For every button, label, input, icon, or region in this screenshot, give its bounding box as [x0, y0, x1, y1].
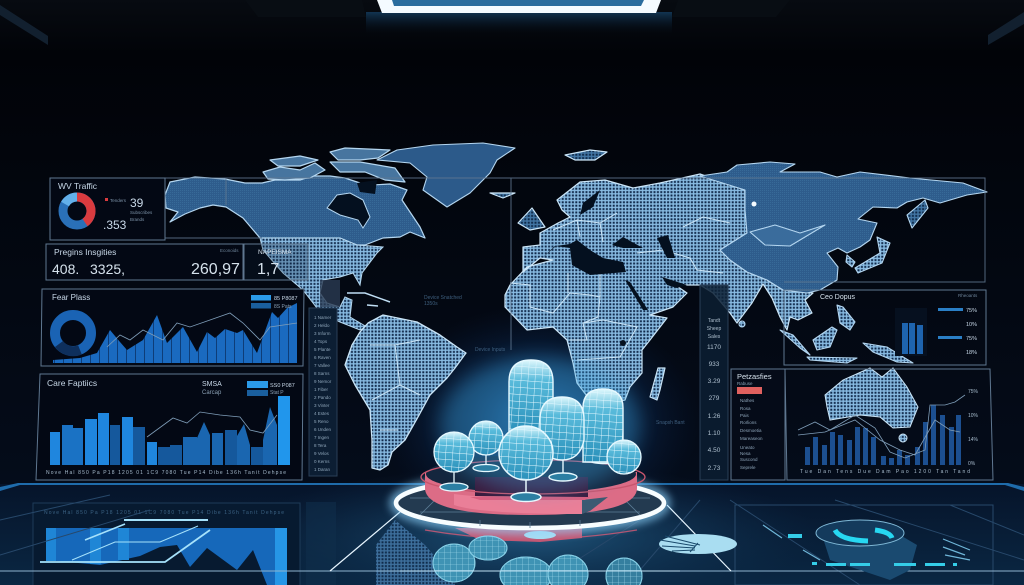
- list items: Desmoetia: [740, 428, 762, 433]
- list items: Rosa: [740, 406, 751, 411]
- platform with domes: [396, 357, 664, 528]
- heading: Petzasfies: [737, 372, 772, 381]
- legend: SS0 P087: [270, 383, 295, 389]
- heading: Fear Plass: [52, 293, 90, 302]
- list items: Seprele: [740, 465, 756, 470]
- stats: Brands: [130, 217, 145, 222]
- heading: insights: Pregins Insgities: [54, 247, 116, 257]
- panel: number column: Sales: [708, 334, 721, 340]
- heading: Ceo Dopus: [820, 294, 856, 301]
- panel: list column left: 9 Nemor: [314, 379, 332, 384]
- legend: 85 P8087: [274, 296, 298, 302]
- dome: tall right: [583, 389, 623, 464]
- panel: number column: 1170: [707, 344, 721, 351]
- panel: number column: 3.29: [708, 378, 721, 385]
- map: Greenland: [377, 143, 515, 207]
- panel: list column left: 1 Daran: [314, 467, 331, 472]
- panel: list column left: 4 Estes: [314, 411, 330, 416]
- trend line: [147, 412, 277, 437]
- stats: Subscribes: [130, 210, 153, 215]
- panel: list column left: 6 Unden: [314, 427, 332, 432]
- ring glow: [396, 478, 664, 528]
- stat values: NAPEISMA: [258, 249, 292, 256]
- donut chart: [63, 197, 91, 225]
- ring disc: [396, 478, 664, 528]
- list items: Suscond: [740, 457, 758, 462]
- stat values: 3325,: [90, 261, 125, 277]
- reflected axis labels: Nove Hal 850 Pa P18 1205 01 1C9 7080 Tue P14 Dibe 136h Tanit Dehpse: [44, 510, 284, 516]
- map: South America: [345, 315, 466, 470]
- stat values: [52, 248, 292, 278]
- map labels: [424, 295, 685, 426]
- subheading: [202, 381, 222, 396]
- list items: Uneato: [740, 445, 755, 450]
- map: Foxe Basin: [357, 180, 377, 194]
- panel: list column left: 5 Plante: [314, 347, 331, 352]
- platform reflection: [400, 528, 680, 585]
- panel: list column left: [309, 280, 340, 476]
- list items: [740, 398, 763, 470]
- heading: Care Faptiics: [47, 378, 97, 388]
- list items: Rorlions: [740, 420, 757, 425]
- panel: Australia chart: [785, 369, 993, 480]
- map: seas: [540, 190, 687, 346]
- panel: list column left: 2 Heldo: [314, 323, 330, 328]
- bar list: 75%: [966, 336, 977, 342]
- legend: [251, 295, 298, 310]
- panel: list column left: 8 Tera: [314, 443, 327, 448]
- reflected map: [376, 520, 455, 585]
- list items: Mareaseon: [740, 436, 763, 441]
- dome: back left: [469, 421, 503, 472]
- panel: number column: 2.73: [708, 465, 721, 472]
- panel: area chart: [41, 289, 304, 366]
- heading: traffic: WV Traffic: [58, 181, 98, 191]
- panel: number column: 933: [709, 361, 720, 368]
- panel: list column left: 3 Vinter: [314, 403, 330, 408]
- panel: list column left: 1 Fiber: [314, 387, 329, 392]
- panel: list column left: 3 Inform: [314, 331, 331, 336]
- panel: list column left: 5 Reno: [314, 419, 329, 424]
- legend: [247, 381, 295, 396]
- pie reflection: [659, 534, 737, 554]
- axis labels: Tue Dan Tens Due Dam Pao 1200 Tan Tand: [800, 469, 970, 475]
- panel: purposes list: Rabuse: [737, 381, 753, 386]
- small bar chart: [895, 308, 927, 356]
- legend: 8S Pats: [274, 304, 292, 310]
- panel: number column: [700, 285, 728, 480]
- map: Australia: [825, 368, 918, 442]
- bar list: 18%: [966, 350, 977, 356]
- trend lines: [798, 395, 965, 458]
- map labels: Snapsh Bant: [656, 420, 685, 426]
- map labels: 1350s: [424, 301, 438, 307]
- stats: Tenders: [110, 198, 127, 203]
- stat values: 408.: [52, 261, 79, 277]
- list items: Pais: [740, 413, 750, 418]
- map marker: [752, 202, 756, 206]
- red tag: [737, 387, 762, 394]
- panel: list column left: 8 Sarns: [314, 371, 330, 376]
- bar list: 10%: [966, 322, 977, 328]
- subheading: SMSA: [202, 381, 222, 388]
- pink platform: [421, 455, 645, 515]
- panel: number column: 1.10: [708, 430, 721, 437]
- stat values: Econoids: [220, 248, 239, 253]
- donut chart: [55, 315, 91, 351]
- stats: .353: [103, 218, 127, 232]
- ceiling with light: [0, 0, 1024, 45]
- panel: list column left: 1 Namer: [314, 315, 332, 320]
- map labels: Device Inputs: [475, 347, 506, 353]
- panel: number column: 4.50: [708, 447, 721, 454]
- panel: list column left: 9 Velos: [314, 451, 330, 456]
- floor: [0, 465, 1024, 585]
- right floor gadget: [763, 520, 970, 580]
- panel: number column: 279: [709, 395, 720, 402]
- subheading: Carcap: [202, 390, 222, 396]
- dome: left: [434, 432, 474, 491]
- map: Caribbean: [347, 293, 390, 306]
- left floor reflection: [33, 503, 300, 585]
- list items: Nesa: [740, 451, 751, 456]
- panel: list column left: 6 Raven: [314, 355, 331, 360]
- panel: traffic donut: [50, 178, 165, 240]
- stat values: 260,97: [191, 261, 240, 278]
- map: Europe, Africa and Asia dotted: [490, 150, 813, 405]
- panel: purposes list: [731, 369, 785, 480]
- panel: list column left: 7 Vallee: [314, 363, 330, 368]
- dome: tall back: [509, 360, 553, 432]
- panel: list column left: 7 Ingen: [314, 435, 330, 440]
- floor glow: [240, 465, 820, 585]
- bar list: 75%: [966, 308, 977, 314]
- axis labels: 75%: [968, 389, 979, 395]
- map: country borders: [510, 213, 730, 360]
- axis labels: [800, 389, 979, 475]
- panel: number column: Tandt: [708, 318, 721, 324]
- map: Hudson Bay: [327, 193, 370, 228]
- axis labels: Nove Hal 850 Pa P18 1205 01 1C9 7080 Tue P14 Dibe 136h Tanit Dehpse: [46, 470, 286, 476]
- legend: Stat P: [270, 390, 284, 396]
- map: North America north: [165, 148, 425, 245]
- floor perspective lines: [0, 495, 1024, 585]
- dome: middle: [540, 397, 584, 481]
- panel: region stats: [784, 290, 986, 365]
- reflected light streaks: [40, 520, 210, 562]
- dome: small right: [607, 440, 641, 474]
- stats: 39: [130, 196, 144, 210]
- list items: Nathes: [740, 398, 755, 403]
- panel: list column left: 2 Pando: [314, 395, 331, 400]
- axis labels: 14%: [968, 437, 979, 443]
- map labels: Device Snatched: [424, 295, 462, 301]
- stat values: 1,7: [257, 261, 279, 278]
- panel: number column: Sheep: [707, 326, 721, 332]
- dome: front centre: [499, 426, 553, 502]
- dome glow: [440, 357, 640, 493]
- axis labels: 0%: [968, 461, 976, 467]
- panel: region stats: Rheoants: [958, 293, 978, 298]
- ring spokes: [410, 490, 650, 528]
- panel: list column left: 0 Kerns: [314, 459, 330, 464]
- bars: [805, 405, 961, 465]
- bars: [50, 396, 290, 465]
- map: United States and Mexico: [260, 238, 383, 330]
- map frame lines: [165, 178, 985, 350]
- panel: insights stats: [46, 244, 308, 280]
- area chart: [53, 303, 297, 363]
- glow behind the map: [380, 305, 700, 535]
- panel: bar chart: [36, 374, 303, 480]
- stats: [103, 196, 153, 232]
- reflected side column: [306, 502, 336, 585]
- map: Asia solid: [700, 162, 987, 363]
- panel: list column left: 4 Tops: [314, 339, 328, 344]
- axis labels: 10%: [968, 413, 979, 419]
- panel: number column: 1.26: [708, 413, 721, 420]
- world map: [165, 143, 987, 535]
- bar list: [938, 308, 977, 356]
